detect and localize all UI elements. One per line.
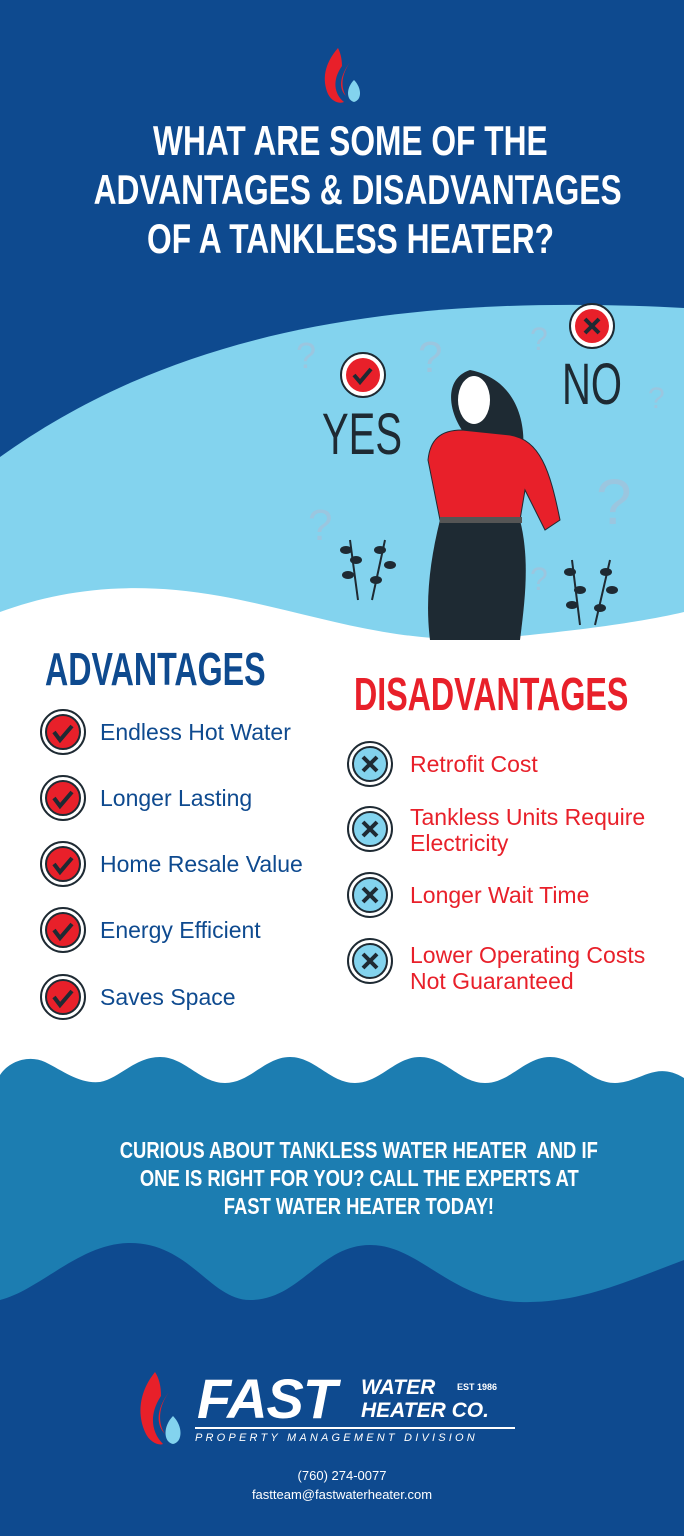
illustration: woman with yes/no: ? — [648, 382, 665, 415]
illustration: woman with yes/no: YES — [322, 402, 402, 467]
disadvantages list: Electricity — [410, 830, 508, 856]
illustration: woman with yes/no: ? — [530, 561, 548, 597]
advantages list: Home Resale Value — [100, 851, 303, 877]
advantages list: Longer Lasting — [100, 785, 252, 811]
illustration: woman with yes/no: ? — [418, 333, 442, 382]
advantages list: Energy Efficient — [100, 917, 261, 943]
call to action text: ONE IS RIGHT FOR YOU? CALL THE EXPERTS AT — [140, 1165, 578, 1191]
logo: WATER — [361, 1376, 435, 1399]
title: OF A TANKLESS HEATER? — [147, 215, 553, 262]
icon: flame logo top — [324, 48, 360, 103]
title — [94, 117, 622, 262]
contact info: (760) 274-0077 — [298, 1468, 386, 1483]
call to action text — [120, 1137, 598, 1219]
icon: yes check — [341, 353, 385, 397]
contact info — [252, 1468, 432, 1502]
heading: disadvantages: DISADVANTAGES — [354, 668, 628, 720]
disadvantages list — [347, 741, 645, 994]
disadvantages list: Retrofit Cost — [410, 751, 538, 777]
logo: FAST — [197, 1367, 336, 1430]
woman — [451, 370, 523, 480]
logo: EST 1986 — [457, 1382, 497, 1392]
logo — [140, 1367, 515, 1444]
illustration: woman with yes/no — [296, 303, 665, 640]
icon: no x — [570, 304, 614, 348]
disadvantages list: Tankless Units Require — [410, 804, 645, 830]
advantages list — [40, 709, 303, 1020]
illustration: woman with yes/no: ? — [308, 501, 332, 550]
logo: PROPERTY MANAGEMENT DIVISION — [195, 1432, 478, 1444]
title: WHAT ARE SOME OF THE — [153, 117, 547, 164]
logo: HEATER CO. — [361, 1399, 489, 1422]
illustration: woman with yes/no: ? — [596, 466, 632, 538]
illustration: woman with yes/no: ? — [296, 335, 316, 376]
illustration: woman with yes/no: ? — [530, 321, 548, 357]
disadvantages list: Not Guaranteed — [410, 968, 574, 994]
contact info: fastteam@fastwaterheater.com — [252, 1487, 432, 1502]
plants — [341, 540, 617, 625]
call to action text: FAST WATER HEATER TODAY! — [224, 1193, 494, 1219]
call to action text: CURIOUS ABOUT TANKLESS WATER HEATER AND IF — [120, 1137, 598, 1163]
title: ADVANTAGES & DISADVANTAGES — [94, 166, 622, 213]
heading: advantages: ADVANTAGES — [45, 643, 266, 695]
advantages list: Endless Hot Water — [100, 719, 291, 745]
disadvantages list: Longer Wait Time — [410, 882, 589, 908]
illustration: woman with yes/no: NO — [562, 352, 622, 417]
advantages list: Saves Space — [100, 984, 236, 1010]
disadvantages list: Lower Operating Costs — [410, 942, 645, 968]
